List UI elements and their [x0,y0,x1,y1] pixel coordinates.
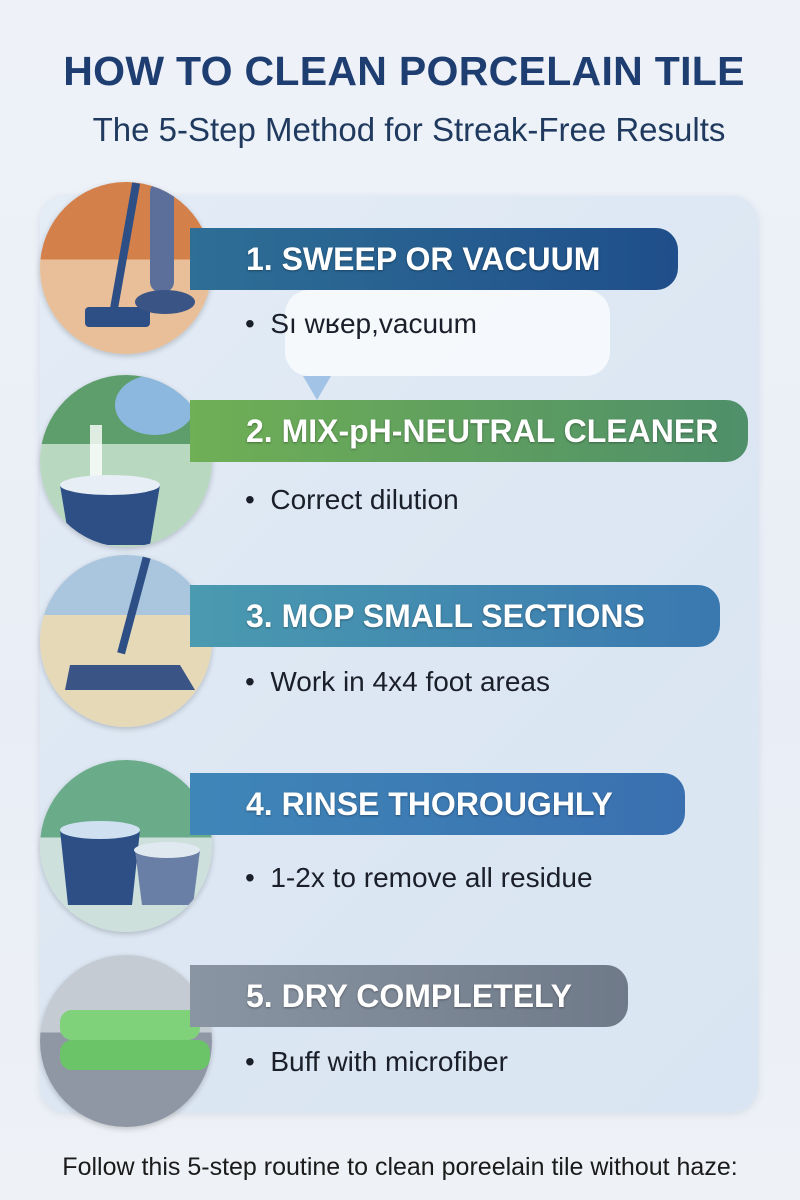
banner: step 4: 4. RINSE THOROUGHLY [246,786,613,822]
icon: mix cleaner [40,375,212,547]
banner: step 2 [190,400,748,462]
banner: step 1 [190,228,678,290]
icon: sweep vacuum [40,182,212,354]
banner: step 5 [190,965,628,1027]
banner: step 3 [190,585,720,647]
text: step 5 bullet: • Buff with microfiber [245,1046,508,1077]
banner: step 5: 5. DRY COMPLETELY [246,978,572,1014]
text: step 4 bullet: • 1-2x to remove all residue [245,862,593,893]
callout: speech bubble [285,290,610,400]
panel: steps background [40,196,758,1112]
banner: step 4 [190,773,685,835]
banner: step 3: 3. MOP SMALL SECTIONS [246,598,645,634]
title: HOW TO CLEAN PORCELAIN TILE [63,48,745,94]
icon: rinse buckets [40,760,212,932]
text: step 2 bullet: • Correct dilution [245,484,459,515]
text: step 1 bullet: • Sı wʁep,vacuum [245,308,477,339]
icon: microfiber towel [40,955,212,1127]
banner: step 2: 2. MIX-pH-NEUTRAL CLEANER [246,413,718,449]
text: step 3 bullet: • Work in 4x4 foot areas [245,666,550,697]
banner: step 1: 1. SWEEP OR VACUUM [246,241,600,277]
footer text: Follow this 5-step routine to clean poreelain tile without haze: [62,1153,738,1181]
subtitle: The 5-Step Method for Streak-Free Results [93,111,725,148]
icon: mop [40,555,212,727]
